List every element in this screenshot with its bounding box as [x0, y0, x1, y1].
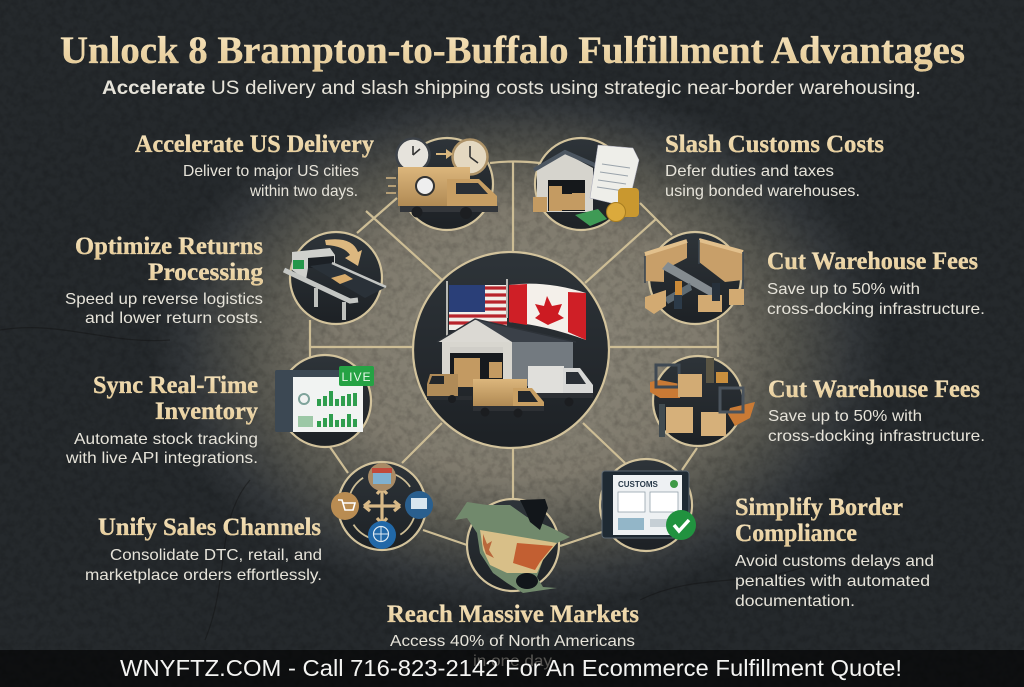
text block: Accelerate US Delivery: within two days. [249, 183, 358, 200]
text block: Unify Sales Channels: marketplace orders effortlessly. [85, 567, 322, 584]
icon: dashboard [275, 370, 363, 432]
heading: Sync Real-Time Inventory: Sync Real-Time [93, 372, 258, 399]
icon: bonded warehouse [533, 152, 597, 212]
text block: Reach Massive Markets: Access 40% of North Americans [390, 633, 635, 650]
icon: document [590, 145, 639, 207]
text block: Reach Massive Markets [390, 633, 635, 670]
icon: globe [368, 521, 396, 549]
text block: Reach Massive Markets: in one day [473, 653, 552, 670]
text block: Slash Customs Costs [665, 163, 860, 200]
heading: Simplify Border Compliance: Compliance [735, 520, 857, 547]
heading: Optimize Returns Processing: Processing [148, 259, 264, 286]
icon: four-way arrows [364, 488, 400, 524]
heading: Reach Massive Markets: Reach Massive Markets [387, 601, 639, 628]
title: Unlock 8 Brampton-to-Buffalo Fulfillment Advantages [60, 29, 965, 72]
panel: slash customs costs icon [533, 138, 639, 230]
subtitle: Accelerate US delivery and slash shipping costs using strategic near-border warehousing. [102, 78, 921, 99]
icon: cart [331, 492, 359, 520]
text block: Slash Customs Costs: using bonded warehouses. [665, 183, 860, 200]
panel: accelerate US delivery icon [386, 138, 498, 230]
panel: forklifts icon [650, 356, 755, 446]
heading: Sync Real-Time Inventory [93, 372, 258, 425]
heading: Cut Warehouse Fees (second): Cut Warehouse Fees [768, 376, 980, 403]
text block: Unify Sales Channels [85, 547, 322, 584]
heading: Simplify Border Compliance: Simplify Border [735, 494, 903, 521]
panel: North America map icon [455, 499, 570, 593]
icon: store [368, 463, 396, 491]
icon: monitor [405, 491, 433, 519]
text block: Unify Sales Channels: Consolidate DTC, retail, and [110, 547, 322, 564]
heading: Unify Sales Channels: Unify Sales Channels [98, 514, 321, 541]
icon: Canadian flag [509, 284, 586, 340]
text block: Simplify Border Compliance: documentation. [735, 593, 855, 610]
icon: customs tablet: CUSTOMS [618, 480, 659, 489]
heading: Slash Customs Costs: Slash Customs Costs [665, 131, 884, 158]
text block: Slash Customs Costs: Defer duties and taxes [665, 163, 834, 180]
panel: returns processing icon [284, 232, 386, 324]
icon: coins and cash [575, 188, 639, 226]
text block: Optimize Returns Processing [65, 291, 263, 327]
icon: racks and boxes [645, 240, 744, 314]
panel: real-time inventory icon [275, 355, 374, 447]
heading: Simplify Border Compliance [735, 494, 903, 547]
icon: clocks [396, 138, 488, 174]
icon: warehouse [437, 319, 576, 387]
text block: Sync Real-Time Inventory: Automate stock tracking [74, 431, 258, 448]
heading: Cut Warehouse Fees: Cut Warehouse Fees [767, 248, 978, 275]
connector network [310, 162, 718, 546]
text block: Accelerate US Delivery [183, 163, 359, 200]
heading: Accelerate US Delivery: Accelerate US Delivery [135, 131, 374, 158]
icon: green check [666, 510, 696, 540]
text block: Simplify Border Compliance: penalties with automated [735, 573, 930, 590]
text block: Optimize Returns Processing: and lower return costs. [85, 310, 263, 327]
heading: Optimize Returns Processing: Optimize Returns [75, 233, 263, 260]
icon: LIVE badge: LIVE [341, 370, 372, 384]
text block: Cut Warehouse Fees: Save up to 50% with [767, 281, 920, 298]
text block: Cut Warehouse Fees (second): Save up to 50% with [768, 408, 922, 425]
icon: US flag [447, 279, 507, 342]
panel: customs compliance icon [600, 459, 696, 551]
heading: Optimize Returns Processing [75, 233, 264, 286]
text block: Cut Warehouse Fees (second) [768, 408, 985, 445]
icon: conveyor [284, 248, 386, 320]
text block: Sync Real-Time Inventory [65, 431, 258, 467]
text block: Sync Real-Time Inventory: with live API integrations. [65, 450, 258, 467]
footer banner [0, 650, 1024, 687]
panel: sales channels icon [331, 462, 433, 550]
center hub: warehouse with flags and trucks [413, 252, 609, 448]
icon: delivery truck [386, 167, 498, 219]
icon: trucks [427, 366, 593, 418]
heading: Sync Real-Time Inventory: Inventory [155, 398, 258, 425]
icon: return arrow [325, 239, 362, 266]
text block: Cut Warehouse Fees (second): cross-docking infrastructure. [768, 428, 985, 445]
icon: forklifts and pallets [650, 358, 755, 437]
panel: cross-docking warehouse icon [645, 232, 744, 324]
text block: Cut Warehouse Fees: cross-docking infrastructure. [767, 301, 985, 318]
footer banner: WNYFTZ.COM - Call 716-823-2142 For An Ecommerce Fulfillment Quote! [120, 655, 902, 681]
icon: map [455, 499, 570, 593]
text block: Accelerate US Delivery: Deliver to major US cities [183, 163, 359, 180]
text block: Simplify Border Compliance [735, 553, 934, 610]
text block: Simplify Border Compliance: Avoid customs delays and [735, 553, 934, 570]
text block: Optimize Returns Processing: Speed up reverse logistics [65, 291, 263, 308]
text block: Cut Warehouse Fees [767, 281, 985, 318]
